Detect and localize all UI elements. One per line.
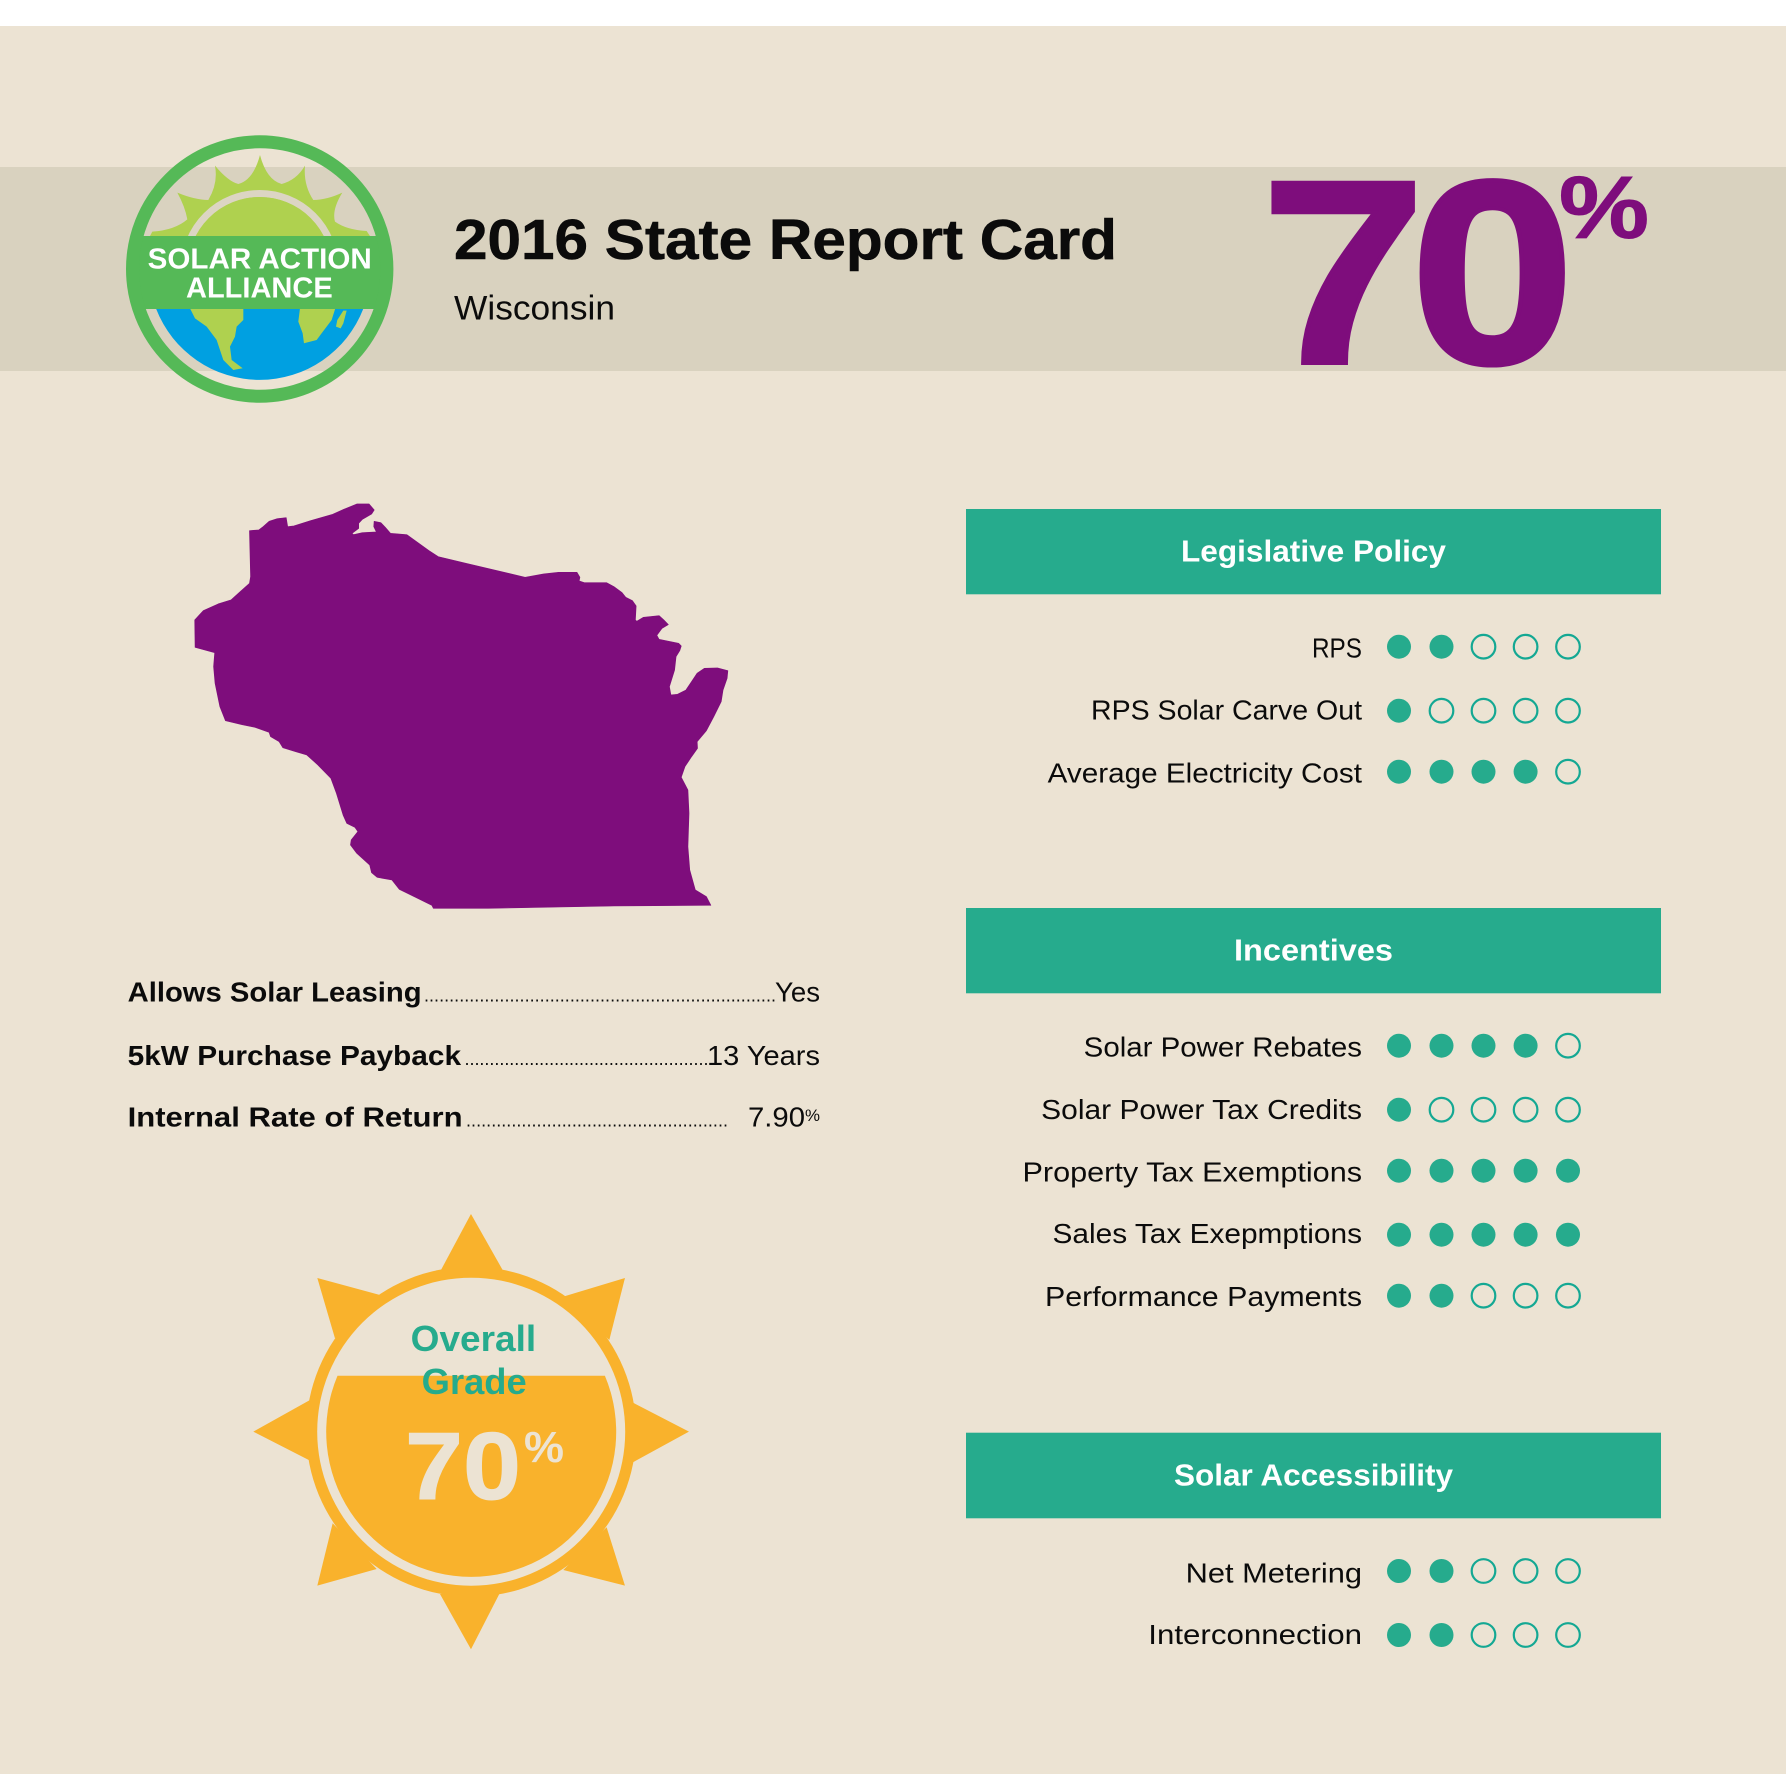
grade value 70%: [405, 1413, 564, 1520]
stat: solar leasing: ......................................................................: [424, 986, 776, 1006]
heading: legislative policy: Legislative Policy: [1181, 534, 1447, 569]
logo wordmark: [148, 243, 372, 305]
stat: rate of return: Internal Rate of Return: [128, 1102, 463, 1133]
rating: property tax exemptions: [1022, 1157, 1580, 1188]
grade value 70%: 70: [405, 1413, 521, 1520]
rating: interconnection: Interconnection: [1148, 1619, 1362, 1650]
header band: [0, 167, 1786, 371]
rating: sales tax exemptions: Sales Tax Exepmptions: [1052, 1218, 1362, 1249]
stat: solar leasing: Allows Solar Leasing: [128, 977, 422, 1008]
logo sun rays: [150, 155, 370, 236]
logo wordmark: SOLAR ACTION: [148, 243, 372, 275]
stats list: [128, 977, 820, 1133]
heading: legislative policy: [966, 509, 1661, 594]
heading: solar accessibility: [966, 1433, 1661, 1518]
rating: property tax exemptions: Property Tax Exemptions: [1022, 1157, 1362, 1188]
sun rays: [253, 1214, 689, 1649]
rating: average electricity cost: Average Electricity Cost: [1048, 758, 1362, 789]
stat: rate of return: %: [805, 1106, 820, 1125]
heading: incentives: [966, 908, 1661, 993]
headline score 70%: 70: [1261, 127, 1575, 419]
logo globe: [156, 305, 363, 380]
sun fill level: [326, 1376, 616, 1577]
logo sun halo: [184, 194, 335, 344]
logo outer ring: [133, 142, 387, 396]
label: overall grade: Overall: [411, 1318, 536, 1359]
rating: RPS: RPS: [1312, 632, 1362, 663]
logo continents: [190, 308, 347, 370]
logo wordmark: ALLIANCE: [186, 273, 333, 305]
stat: rate of return: 7.90: [748, 1102, 805, 1133]
rating: RPS solar carve out: [1091, 694, 1580, 725]
stat: rate of return: [128, 1102, 820, 1133]
map: Wisconsin: [195, 504, 728, 908]
rating: interconnection: [1148, 1619, 1580, 1650]
rating: net metering: Net Metering: [1186, 1557, 1362, 1588]
stat: rate of return: ....................................................: [466, 1111, 728, 1131]
sun outer ring: [306, 1267, 636, 1597]
heading: incentives: Incentives: [1234, 933, 1393, 968]
stat: payback: 5kW Purchase Payback: [128, 1040, 462, 1071]
title: 2016 State Report Card: [454, 208, 1117, 272]
rating: solar power rebates: Solar Power Rebates: [1084, 1032, 1362, 1063]
rating: solar power tax credits: Solar Power Tax Credits: [1041, 1094, 1362, 1125]
stat: solar leasing: Yes: [775, 977, 820, 1008]
logo green band: [134, 236, 385, 309]
panel: legislative policy: [966, 509, 1661, 789]
logo sun disc: [188, 197, 332, 341]
rating: sales tax exemptions: [1052, 1218, 1580, 1249]
heading: solar accessibility: Solar Accessibility: [1174, 1458, 1454, 1493]
rating: solar power rebates: [1084, 1032, 1580, 1063]
rating: RPS solar carve out: RPS Solar Carve Out: [1091, 694, 1362, 725]
rating: performance payments: Performance Payments: [1045, 1281, 1362, 1312]
logo: Solar Action Alliance: [133, 142, 387, 396]
rating: RPS: [1312, 632, 1580, 663]
sun inner face: [317, 1278, 625, 1586]
stat: solar leasing: [128, 977, 820, 1008]
panel: incentives: [966, 908, 1661, 1312]
label: overall grade: Grade: [422, 1361, 527, 1402]
headline score 70%: %: [1559, 158, 1649, 257]
overall grade sun badge: [253, 1214, 689, 1649]
rating: performance payments: [1045, 1281, 1580, 1312]
panel: solar accessibility: [966, 1433, 1661, 1650]
rating: average electricity cost: [1048, 758, 1580, 789]
rating: solar power tax credits: [1041, 1094, 1580, 1125]
stat: payback: [128, 1040, 820, 1071]
label: overall grade: [411, 1318, 536, 1402]
stat: payback: 13 Years: [707, 1040, 820, 1071]
stat: payback: .................................................: [464, 1049, 708, 1069]
subtitle: state name: Wisconsin: [454, 289, 615, 327]
rating: net metering: [1186, 1557, 1580, 1588]
grade value 70%: %: [524, 1423, 564, 1472]
